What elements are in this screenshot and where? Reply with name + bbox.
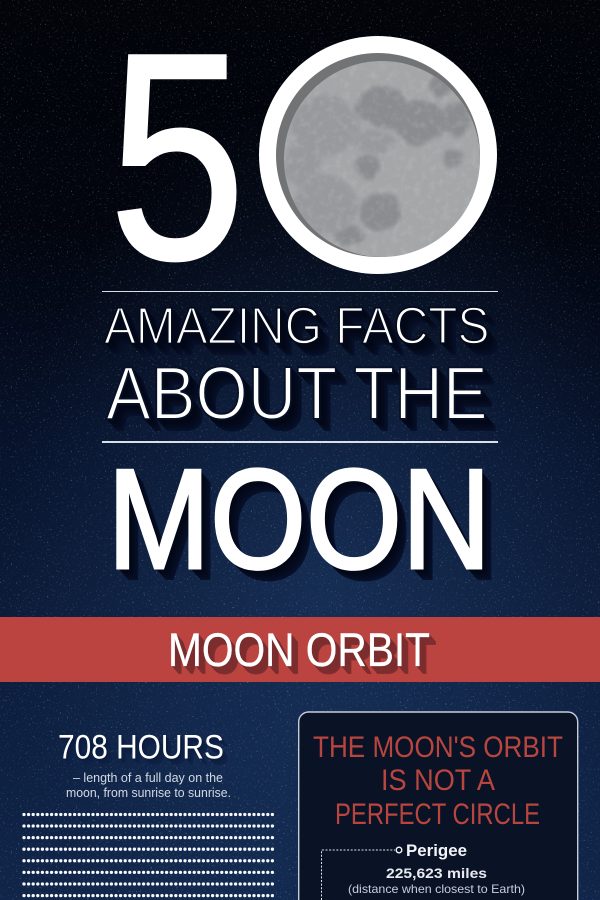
panel heading: PERFECT CIRCLE	[335, 798, 540, 831]
divider rule below subtitle	[102, 441, 498, 442]
fact description: – length of a full day on the	[73, 771, 223, 785]
panel heading: IS NOT A	[381, 764, 495, 797]
panel heading: THE MOON'S ORBIT	[313, 731, 563, 764]
perigee note: (distance when closest to Earth)	[348, 882, 525, 896]
subtitle: amazing facts: AMAZING FACTS	[104, 298, 489, 356]
section banner: moon orbit	[0, 616, 600, 682]
fact heading: 708 hours: 708 HOURS	[58, 728, 224, 766]
banner heading: MOON ORBIT	[168, 622, 430, 676]
subtitle: about the: ABOUT THE	[106, 351, 488, 435]
panel heading	[313, 731, 563, 831]
title: moon: MOON	[108, 440, 491, 599]
icon: moon forming the zero	[259, 36, 497, 274]
perigee label: Perigee	[406, 842, 467, 860]
big number five of the title: 5	[109, 0, 246, 321]
fact description: moon, from sunrise to sunrise.	[66, 786, 231, 800]
divider rule above subtitle	[102, 290, 498, 292]
orbit diagram line with perigee marker	[322, 847, 402, 900]
perigee distance: 225,623 miles	[386, 865, 487, 881]
